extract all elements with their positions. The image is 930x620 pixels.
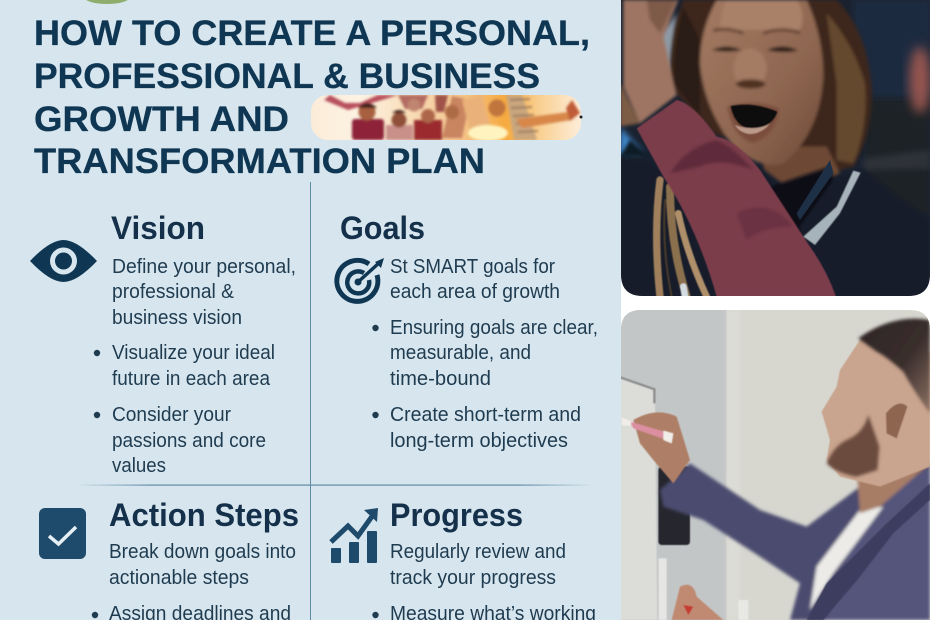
text: vision body: future in each area: [112, 368, 271, 390]
text: action steps body: actionable steps: [109, 567, 249, 589]
text: goals body: measurable, and: [390, 342, 531, 364]
icon: cropped green logo at top: [84, 0, 130, 4]
face: [700, 0, 823, 165]
text: vision body: [94, 256, 296, 477]
divider lines: [75, 182, 595, 620]
text: vision body: Consider your: [112, 404, 231, 426]
heading: vision: Vision: [111, 210, 205, 246]
text: goals body: Create short-term and: [390, 404, 581, 426]
panel: action steps: [39, 497, 299, 620]
text: vision body: professional &: [112, 281, 235, 303]
panel: progress: [331, 497, 596, 620]
blond hair strands: [657, 180, 707, 297]
title: GROWTH AND: [34, 100, 289, 139]
lower hand: [672, 585, 723, 620]
panel: infographic background: [0, 0, 621, 620]
hand and forearm: [623, 0, 678, 123]
text: action steps body: Break down goals into: [109, 541, 296, 563]
jacket: [660, 463, 930, 620]
hair: [858, 319, 930, 413]
head: [822, 336, 930, 487]
icon: growth chart: [331, 508, 378, 563]
background hand: [909, 47, 930, 113]
sleeve: [637, 100, 836, 297]
text: progress body: track your progress: [390, 567, 556, 589]
title: [34, 14, 590, 181]
text: progress body: [372, 541, 596, 620]
photo: shouting woman with raised arm: [620, 0, 930, 297]
text: vision body: business vision: [112, 307, 242, 329]
beard: [827, 415, 879, 477]
icon: target with arrow: [337, 258, 384, 301]
heading: goals: Goals: [340, 210, 425, 246]
neck: [856, 461, 930, 514]
text: vision body: passions and core: [112, 430, 266, 452]
text: vision body: Define your personal,: [112, 256, 296, 278]
text: goals body: St SMART goals for: [390, 256, 555, 278]
text: goals body: Ensuring goals are clear,: [390, 317, 598, 339]
text: progress body: Regularly review and: [390, 541, 566, 563]
title: HOW TO CREATE A PERSONAL,: [34, 14, 590, 53]
title: TRANSFORMATION PLAN: [34, 142, 485, 181]
text: goals body: [372, 256, 598, 452]
text: goals body: long-term objectives: [390, 430, 568, 452]
text: vision body: Visualize your ideal: [112, 342, 275, 364]
hair: [670, 0, 872, 173]
text: action steps body: [92, 541, 296, 620]
text: goals body: time-bound: [390, 368, 491, 390]
photo: man writing on whiteboard: [620, 310, 930, 620]
neck: [762, 144, 842, 184]
hand: [633, 412, 690, 483]
panel: vision: [30, 210, 296, 477]
title: PROFESSIONAL & BUSINESS: [34, 57, 540, 96]
photo: group of friends in a pill: [311, 95, 582, 141]
shirt: [810, 507, 883, 610]
heading: progress: Progress: [390, 497, 523, 533]
hoodie: [620, 157, 930, 297]
heading: action steps: Action Steps: [109, 497, 299, 533]
icon: eye: [30, 240, 97, 282]
text: goals body: each area of growth: [390, 281, 560, 303]
text: vision body: values: [112, 455, 166, 477]
icon: checkbox: [39, 508, 86, 559]
panel: goals: [337, 210, 598, 452]
